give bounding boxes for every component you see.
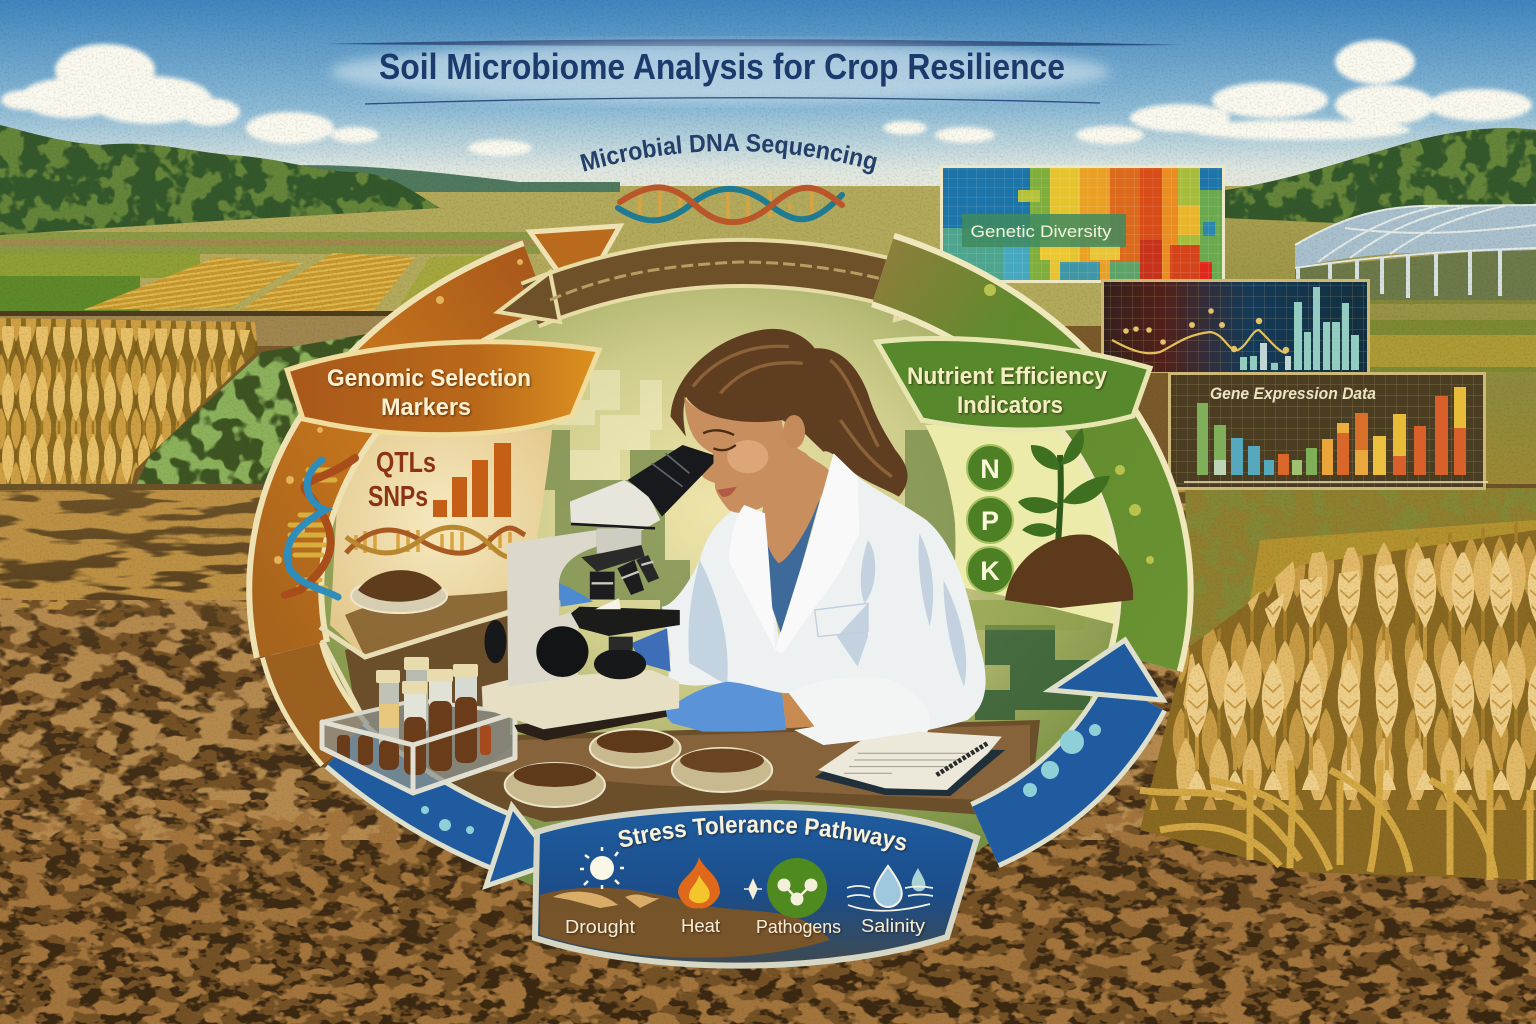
eyepiece (628, 445, 713, 517)
stress labels: Salinity (861, 916, 925, 936)
petri dish right (672, 748, 772, 792)
tree line left (0, 125, 440, 235)
card bottom edge (320, 611, 512, 712)
scientist lab coat (662, 453, 986, 745)
slide (595, 598, 621, 609)
cracked soil (0, 600, 1536, 1024)
heading: gene expression data: Gene Expression Data (1210, 384, 1376, 403)
microscope arm (507, 530, 597, 687)
panel: gene expression data (1168, 372, 1488, 490)
field track (0, 311, 440, 316)
text: nutrient efficiency indicators: Nutrient Efficiency (907, 363, 1108, 390)
golden crop strips (83, 257, 303, 310)
tube mid right (427, 669, 453, 771)
banner: genomic selection markers (287, 342, 599, 435)
scientist back glove (559, 583, 593, 607)
face features (703, 430, 736, 450)
badge N (967, 445, 1013, 491)
panel: title banner (325, 39, 1180, 104)
distant fields (0, 186, 1536, 326)
icon: DNA helix top (618, 187, 842, 222)
petri dish left (505, 763, 605, 807)
scientist and microscope scene (482, 329, 1005, 807)
soil ground (0, 484, 1536, 1024)
text: genomic selection markers: Genomic Selection (327, 365, 531, 392)
badge K: K (980, 556, 1000, 586)
rack floor (322, 700, 515, 793)
stress labels: Pathogens (756, 917, 841, 937)
label: genetic diversity: Genetic Diversity (970, 222, 1112, 241)
clouds left (1, 44, 532, 156)
greenhouse (1295, 205, 1536, 300)
lab bench (345, 612, 1040, 822)
rack back rail (322, 700, 515, 722)
lapels (729, 453, 859, 653)
wrist (782, 693, 815, 728)
central disc (300, 260, 1140, 920)
wheat field right (1140, 520, 1536, 880)
icon: soil petri dish left (351, 570, 447, 613)
text: genomic selection markers: Markers (381, 394, 471, 421)
back tube (404, 657, 429, 732)
bar chart: markers (433, 443, 511, 517)
arrow ring (274, 226, 1163, 886)
lips (717, 487, 737, 497)
arrow: blue right arc (985, 640, 1163, 835)
sky (0, 0, 1536, 200)
coat shading (688, 533, 966, 720)
rack frame (322, 713, 515, 793)
sleeve cuff (789, 677, 930, 745)
banner: nutrient efficiency indicators (877, 339, 1150, 430)
right meadow behind wheat (1185, 488, 1536, 650)
panel: genetic diversity heatmap (940, 165, 1225, 283)
badge P (967, 497, 1013, 543)
QTLs and SNPs text (368, 447, 436, 513)
far tree line (240, 165, 620, 192)
side knob back (484, 620, 506, 663)
neck and face (684, 397, 831, 563)
clouds right (883, 40, 1532, 144)
tube far right (453, 664, 478, 763)
right arm glove and sleeve (631, 628, 671, 672)
arrow: blue left arc (345, 745, 556, 886)
scientist hair (671, 329, 908, 497)
furrow rows (0, 490, 1536, 610)
microscope head (570, 480, 660, 531)
pocket (815, 603, 868, 637)
microscope (482, 445, 713, 741)
icon: salinity drop (847, 866, 933, 911)
panel: line and bar chart (1101, 279, 1370, 373)
hair highlights (693, 346, 892, 477)
microscope base shadow (514, 708, 667, 741)
arrow: inner brown arc (498, 262, 958, 322)
stress labels (565, 916, 925, 937)
scientist blue shirt (760, 500, 820, 637)
small side tubes (337, 725, 491, 765)
line trend (1112, 308, 1289, 353)
focus knob (536, 626, 588, 677)
text: genomic selection markers (327, 365, 531, 421)
heading: stress tolerance pathways: Stress Tolerance Pathways (618, 816, 908, 854)
tube front (402, 681, 427, 775)
badge P: P (981, 506, 999, 536)
bars (1197, 387, 1466, 475)
front glove (663, 682, 786, 732)
icon: plant on soil (1005, 428, 1133, 608)
badge K (967, 547, 1013, 593)
ear (783, 415, 805, 448)
NPK badges (967, 445, 1013, 593)
arrow: orange genomic arc (285, 226, 620, 745)
heatmap cells (943, 168, 1222, 280)
objectives (581, 545, 645, 572)
notebook (815, 732, 1005, 796)
stress labels: Heat (681, 916, 720, 936)
QTLs and SNPs text: SNPs (368, 481, 428, 513)
green crop rows (135, 330, 440, 492)
splatter (421, 724, 1101, 834)
petri dish back (590, 729, 680, 768)
stress labels: Drought (565, 917, 635, 937)
corn rows left (0, 318, 258, 495)
label: genetic diversity (962, 214, 1126, 247)
title: Soil Microbiome Analysis for Crop Resilience (379, 46, 1065, 87)
test tube rack (322, 657, 515, 793)
stage (571, 607, 680, 636)
tree line right (1225, 128, 1536, 235)
tube left (376, 670, 400, 770)
bars (1240, 287, 1359, 370)
mosaic tiles (540, 370, 1090, 720)
icon: pathogens (744, 858, 827, 918)
banner: stress tolerance pathways (532, 804, 981, 969)
arrow: green nutrient arc (883, 270, 1155, 662)
text: nutrient efficiency indicators: Indicators (957, 392, 1063, 419)
badge N: N (980, 454, 1000, 484)
cheek light (727, 440, 768, 473)
icon: flame (678, 857, 720, 908)
panel: genomic cream card (330, 430, 552, 657)
QTLs and SNPs text: QTLs (376, 447, 436, 479)
condenser (594, 649, 646, 679)
icon: horizontal DNA helix (346, 527, 525, 557)
text: nutrient efficiency indicators (907, 363, 1108, 419)
panel: nutrient cream card (925, 425, 1132, 628)
microscope base (482, 670, 679, 729)
icon: vertical DNA helix (285, 458, 355, 597)
icon: drought sun (553, 847, 660, 908)
heading: microbial DNA sequencing: Microbial DNA Sequencing (580, 134, 877, 174)
